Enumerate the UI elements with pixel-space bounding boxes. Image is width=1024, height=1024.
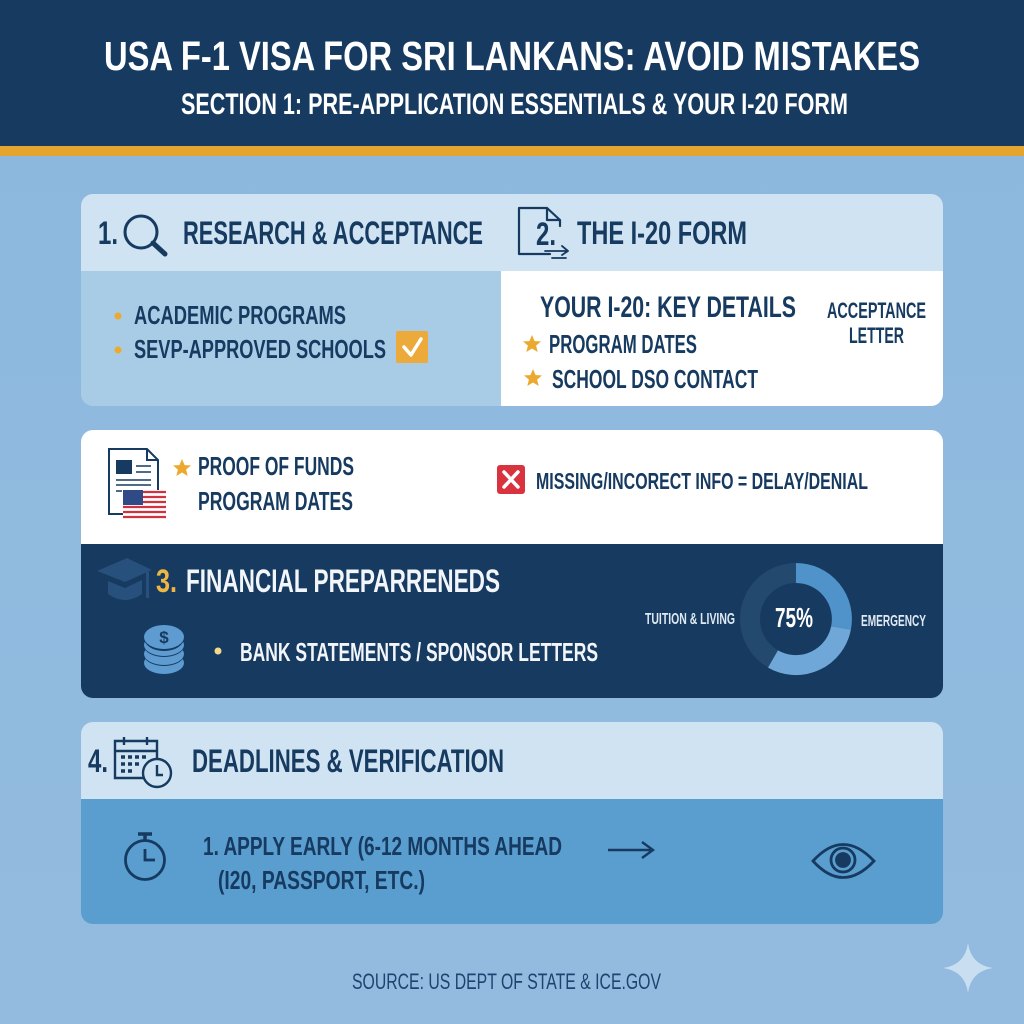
panel: deadlines and verification	[81, 722, 943, 924]
list: bank statements: BANK STATEMENTS / SPONSOR LETTERS	[240, 637, 598, 667]
donut chart	[645, 573, 926, 665]
chart label: tuition: TUITION & LIVING	[645, 611, 735, 628]
icon: stopwatch	[126, 834, 164, 880]
donut chart: 75%	[775, 602, 813, 633]
heading: step 1: 1.	[98, 215, 118, 251]
text: I-20 key details: SCHOOL DSO CONTACT	[552, 364, 758, 394]
heading: step 1	[98, 215, 483, 251]
source note: SOURCE: US DEPT OF STATE & ICE.GOV	[352, 969, 661, 994]
icon: calendar with clock	[115, 737, 171, 787]
icon: eye	[813, 844, 874, 878]
text: proof of funds: PROOF OF FUNDS	[198, 451, 354, 481]
heading: step 3	[156, 563, 500, 599]
text: I-20 key details: PROGRAM DATES	[549, 329, 697, 359]
text: proof of funds: PROGRAM DATES	[198, 486, 353, 516]
text: apply early	[203, 831, 562, 895]
icon: coin stack: $	[159, 628, 169, 647]
icon: graduation cap	[97, 558, 152, 600]
heading: step 2	[536, 215, 747, 252]
text: I-20 key details: YOUR I-20: KEY DETAILS	[540, 291, 796, 324]
list: research items: SEVP-APPROVED SCHOOLS	[134, 334, 386, 364]
list: bank statements	[214, 637, 598, 667]
text: proof of funds	[173, 451, 354, 516]
panel: funds and financial preparedness	[81, 430, 943, 698]
heading: step 3: 3.	[156, 563, 177, 599]
text: acceptance letter: LETTER	[849, 323, 904, 348]
list: research items	[114, 300, 386, 364]
text: I-20 key details	[523, 291, 796, 394]
heading: step 2: THE I-20 FORM	[577, 215, 747, 251]
warning text: MISSING/INCORECT INFO = DELAY/DENIAL	[536, 468, 868, 494]
heading: step 4: 4.	[88, 743, 108, 779]
text: acceptance letter	[827, 298, 926, 348]
text: apply early: 1. APPLY EARLY (6-12 MONTHS AHEAD	[203, 831, 562, 861]
text: acceptance letter: ACCEPTANCE	[827, 298, 926, 323]
icon: red cross	[497, 465, 525, 494]
header banner	[0, 0, 1024, 156]
icon: sparkle	[943, 943, 993, 993]
heading: step 2: 2.	[536, 216, 556, 252]
icon: coin stack	[144, 625, 184, 674]
panel: research and I-20 form	[81, 194, 943, 406]
icon: document with US flag	[109, 449, 166, 519]
icon: document with arrows	[519, 208, 568, 258]
heading: step 1: RESEARCH & ACCEPTANCE	[183, 215, 483, 251]
list: research items: ACADEMIC PROGRAMS	[134, 300, 346, 330]
chart label: emergency: EMERGENCY	[861, 613, 926, 630]
icon: checkbox	[396, 331, 428, 363]
heading: step 3: FINANCIAL PREPARRENEDS	[186, 563, 500, 599]
text: apply early: (I20, PASSPORT, ETC.)	[218, 865, 425, 895]
heading: step 4	[88, 743, 504, 779]
heading: step 4: DEADLINES & VERIFICATION	[192, 743, 504, 779]
arrow	[608, 842, 653, 858]
icon: magnifying glass	[125, 216, 165, 254]
